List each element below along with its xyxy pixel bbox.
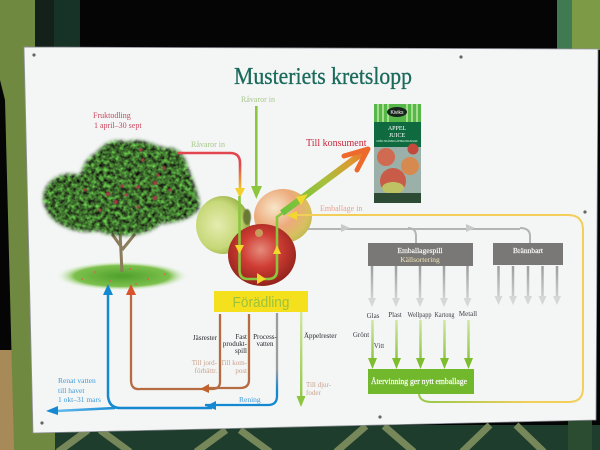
labels: purified water: 1 okt–31 mars [58, 395, 101, 404]
apple: peach [254, 189, 312, 243]
arrows: sorted packaging categories [372, 266, 557, 300]
arrow: raw materials from tree [177, 153, 245, 198]
labels: processing outputs: produkt- [223, 340, 248, 348]
labels: processing outputs: Jäsrester [193, 334, 218, 342]
labels: destinations: Till kom- [221, 359, 248, 367]
juice carton: Kiviks [390, 110, 404, 116]
arrow: raw materials in from above: Råvaror in [241, 95, 275, 104]
arrow: packaging in [287, 204, 583, 402]
label: raw materials in, from tree: Råvaror in [191, 140, 225, 149]
labels: destinations: Till jord- [192, 359, 218, 367]
arrow: brown compost return [126, 284, 249, 393]
panel: burnable: Brännbart [513, 246, 544, 255]
labels: packaging categories: Glas [367, 312, 380, 320]
juice carton [374, 104, 421, 203]
labels: processing outputs: spill [235, 347, 247, 355]
labels: purified water: Rening [239, 395, 261, 404]
labels: packaging categories [353, 310, 477, 350]
icon: apple tree [43, 140, 200, 272]
labels: purified water: Renat vatten [58, 376, 96, 385]
panel: processing: Förädling [232, 294, 290, 311]
labels: packaging categories: Plast [388, 311, 402, 319]
arrow: process flow through apples to consumer [235, 149, 368, 284]
labels: destinations: förbättr. [195, 367, 217, 375]
icon: grass under tree [54, 261, 190, 291]
arrows: recycling [372, 320, 468, 362]
labels: destinations: Till djur- [306, 381, 332, 389]
label: fruit growing season: Fruktodling [93, 111, 131, 120]
label: fruit growing season [93, 111, 142, 130]
arrow: process water to sea [46, 284, 277, 415]
juice carton: APPEL [388, 126, 406, 132]
apple: red [228, 224, 296, 286]
panel: packaging waste sorting: Emballagespill [398, 246, 442, 255]
labels: packaging categories: Metall [459, 310, 477, 318]
labels: processing outputs: Äppelrester [304, 332, 337, 340]
panel: processing [214, 291, 308, 312]
panel: packaging waste sorting [368, 243, 473, 266]
label: fruit growing season: 1 april–30 sept [94, 121, 142, 130]
arrow: raw materials in from above [241, 95, 275, 199]
label: to consumer: Till konsument [306, 138, 367, 149]
labels: packaging categories: Kartong [434, 311, 455, 319]
labels: packaging categories: Wellpapp [408, 311, 432, 319]
title: Musteriets kretslopp [234, 64, 412, 90]
panel: packaging waste sorting: Källsortering [400, 255, 440, 264]
panel: recycling gives new packaging: Återvinning ger nytt emballage [371, 377, 467, 386]
labels: processing outputs: vatten [256, 340, 274, 348]
apple: green [196, 196, 251, 254]
labels: processing outputs [193, 332, 337, 355]
arrowheads: green [368, 358, 473, 369]
arrow: apple residue to feed [296, 312, 306, 407]
labels: processing outputs: Process- [253, 333, 278, 341]
juice carton: FRÅN SKÅNSKA ÄPPELODLINGAR [376, 140, 418, 143]
arrow: waste to sorting and burnable [308, 224, 530, 243]
juice carton: JUICE [389, 133, 405, 139]
arrow: packaging in: Emballage in [320, 204, 362, 213]
arrowheads: grey [368, 296, 561, 307]
labels: destinations: post [235, 367, 247, 375]
screws [32, 53, 587, 425]
labels: destinations [192, 359, 332, 397]
labels: purified water [58, 376, 261, 404]
labels: processing outputs: Fast [235, 333, 247, 341]
panel: recycling gives new packaging [368, 369, 474, 394]
labels: destinations: foder [306, 389, 321, 397]
labels: packaging categories: Grönt [353, 331, 369, 339]
panel: burnable [493, 243, 563, 265]
labels: purified water: till havet [58, 386, 85, 395]
labels: packaging categories: Vitt [374, 342, 384, 350]
